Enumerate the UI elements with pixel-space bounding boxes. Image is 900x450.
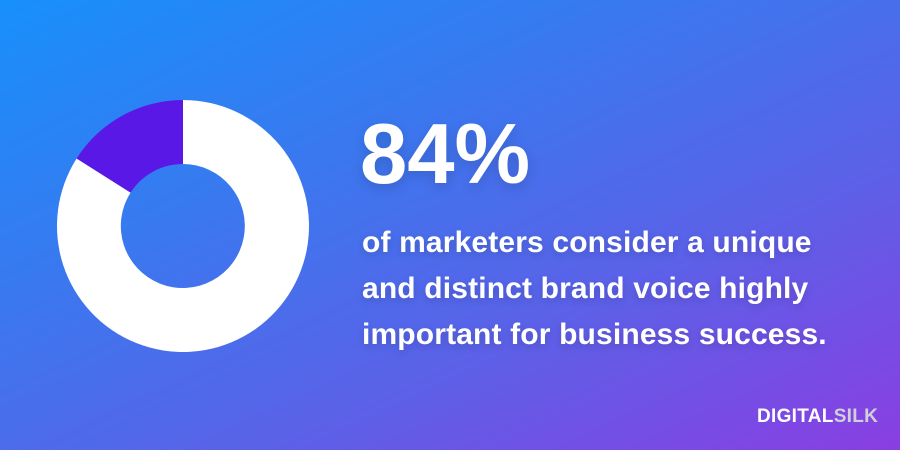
segment: 84% white (57, 100, 309, 352)
description text: of marketers consider a unique (362, 226, 812, 259)
logo: DIGITALSILK (757, 406, 878, 427)
headline stat: 84% (360, 107, 530, 202)
description text (362, 226, 827, 352)
segment: 16% purple (77, 100, 183, 193)
description text: important for business success. (362, 318, 827, 351)
description text: and distinct brand voice highly (362, 272, 808, 305)
